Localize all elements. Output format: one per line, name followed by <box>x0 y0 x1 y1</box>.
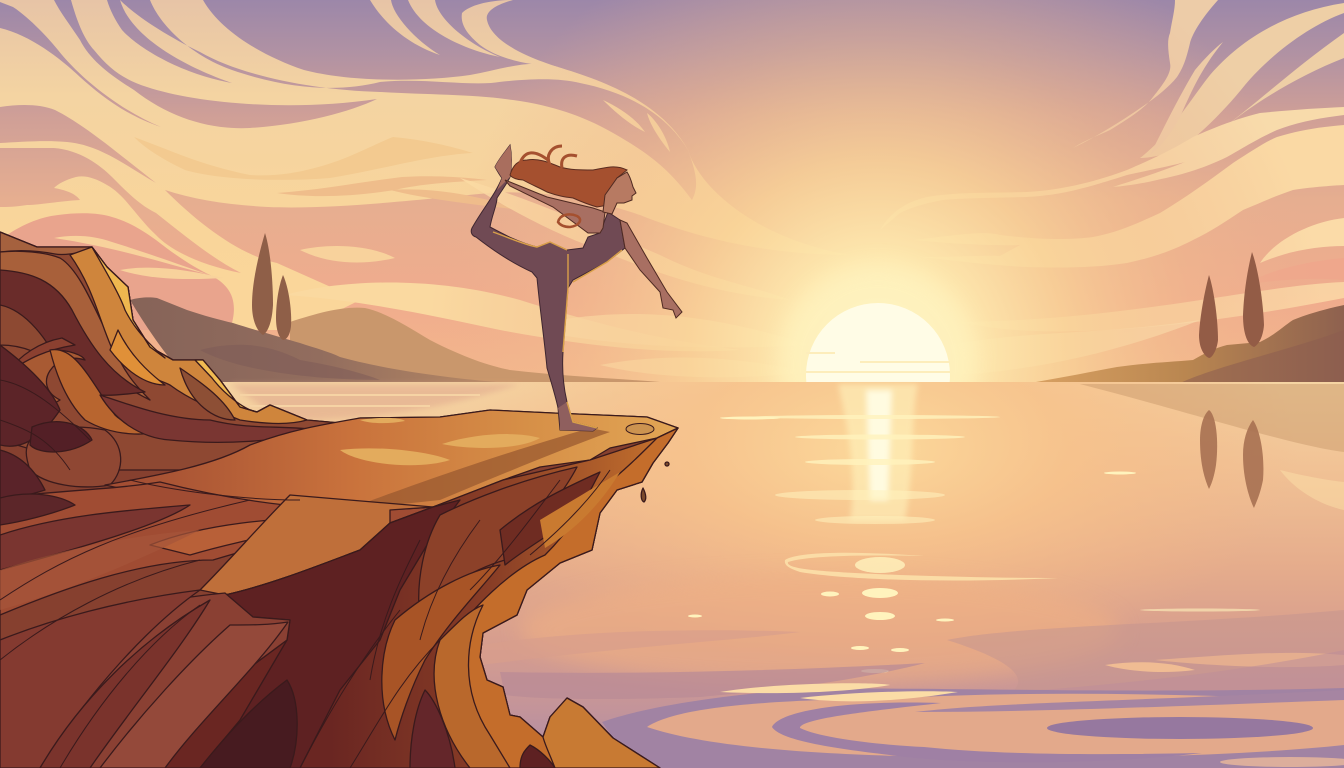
rock spur <box>543 698 660 768</box>
drips <box>641 488 646 502</box>
sun <box>784 303 972 382</box>
lower left slabs <box>0 590 200 768</box>
slab top left of recess <box>0 593 290 768</box>
dark overhang underside <box>143 428 678 768</box>
sun reflection <box>688 384 1260 673</box>
left distant hills <box>130 297 660 383</box>
swirling clouds left <box>0 0 850 377</box>
leg and foot colouring <box>495 145 512 190</box>
forward arm <box>620 220 682 318</box>
bright orange right edge flow <box>449 428 678 768</box>
raised leg torso and hips <box>471 145 625 431</box>
sun glow <box>0 0 1344 390</box>
flow lines <box>0 380 610 768</box>
tree reflections <box>1200 410 1263 508</box>
left cypress trees <box>252 233 291 340</box>
head and neck <box>603 172 636 214</box>
dancer figure <box>471 145 682 431</box>
lower left dark boulders <box>0 345 60 446</box>
swirling clouds right <box>880 0 1344 375</box>
dark recess under shelf <box>200 500 460 768</box>
ledge highlights <box>340 418 540 465</box>
water <box>0 382 1344 768</box>
upper rock cap <box>0 232 340 470</box>
lit orange rock flow <box>70 247 307 423</box>
water ripples lower <box>480 553 1344 768</box>
shelf <box>200 495 433 595</box>
cliff <box>0 232 678 768</box>
top ledge surface <box>105 410 678 515</box>
figure shadow on ledge <box>345 428 610 510</box>
dark flow layers <box>0 270 145 395</box>
arm to foot <box>505 180 605 233</box>
cliff main rock mass <box>0 232 678 768</box>
right cypress trees <box>1199 252 1264 358</box>
mid strata <box>0 482 433 615</box>
right hill <box>1030 305 1344 383</box>
flowing hair <box>510 146 627 227</box>
rim light on body <box>493 232 622 428</box>
sky background <box>0 0 1344 390</box>
mid brown facets <box>419 467 577 620</box>
